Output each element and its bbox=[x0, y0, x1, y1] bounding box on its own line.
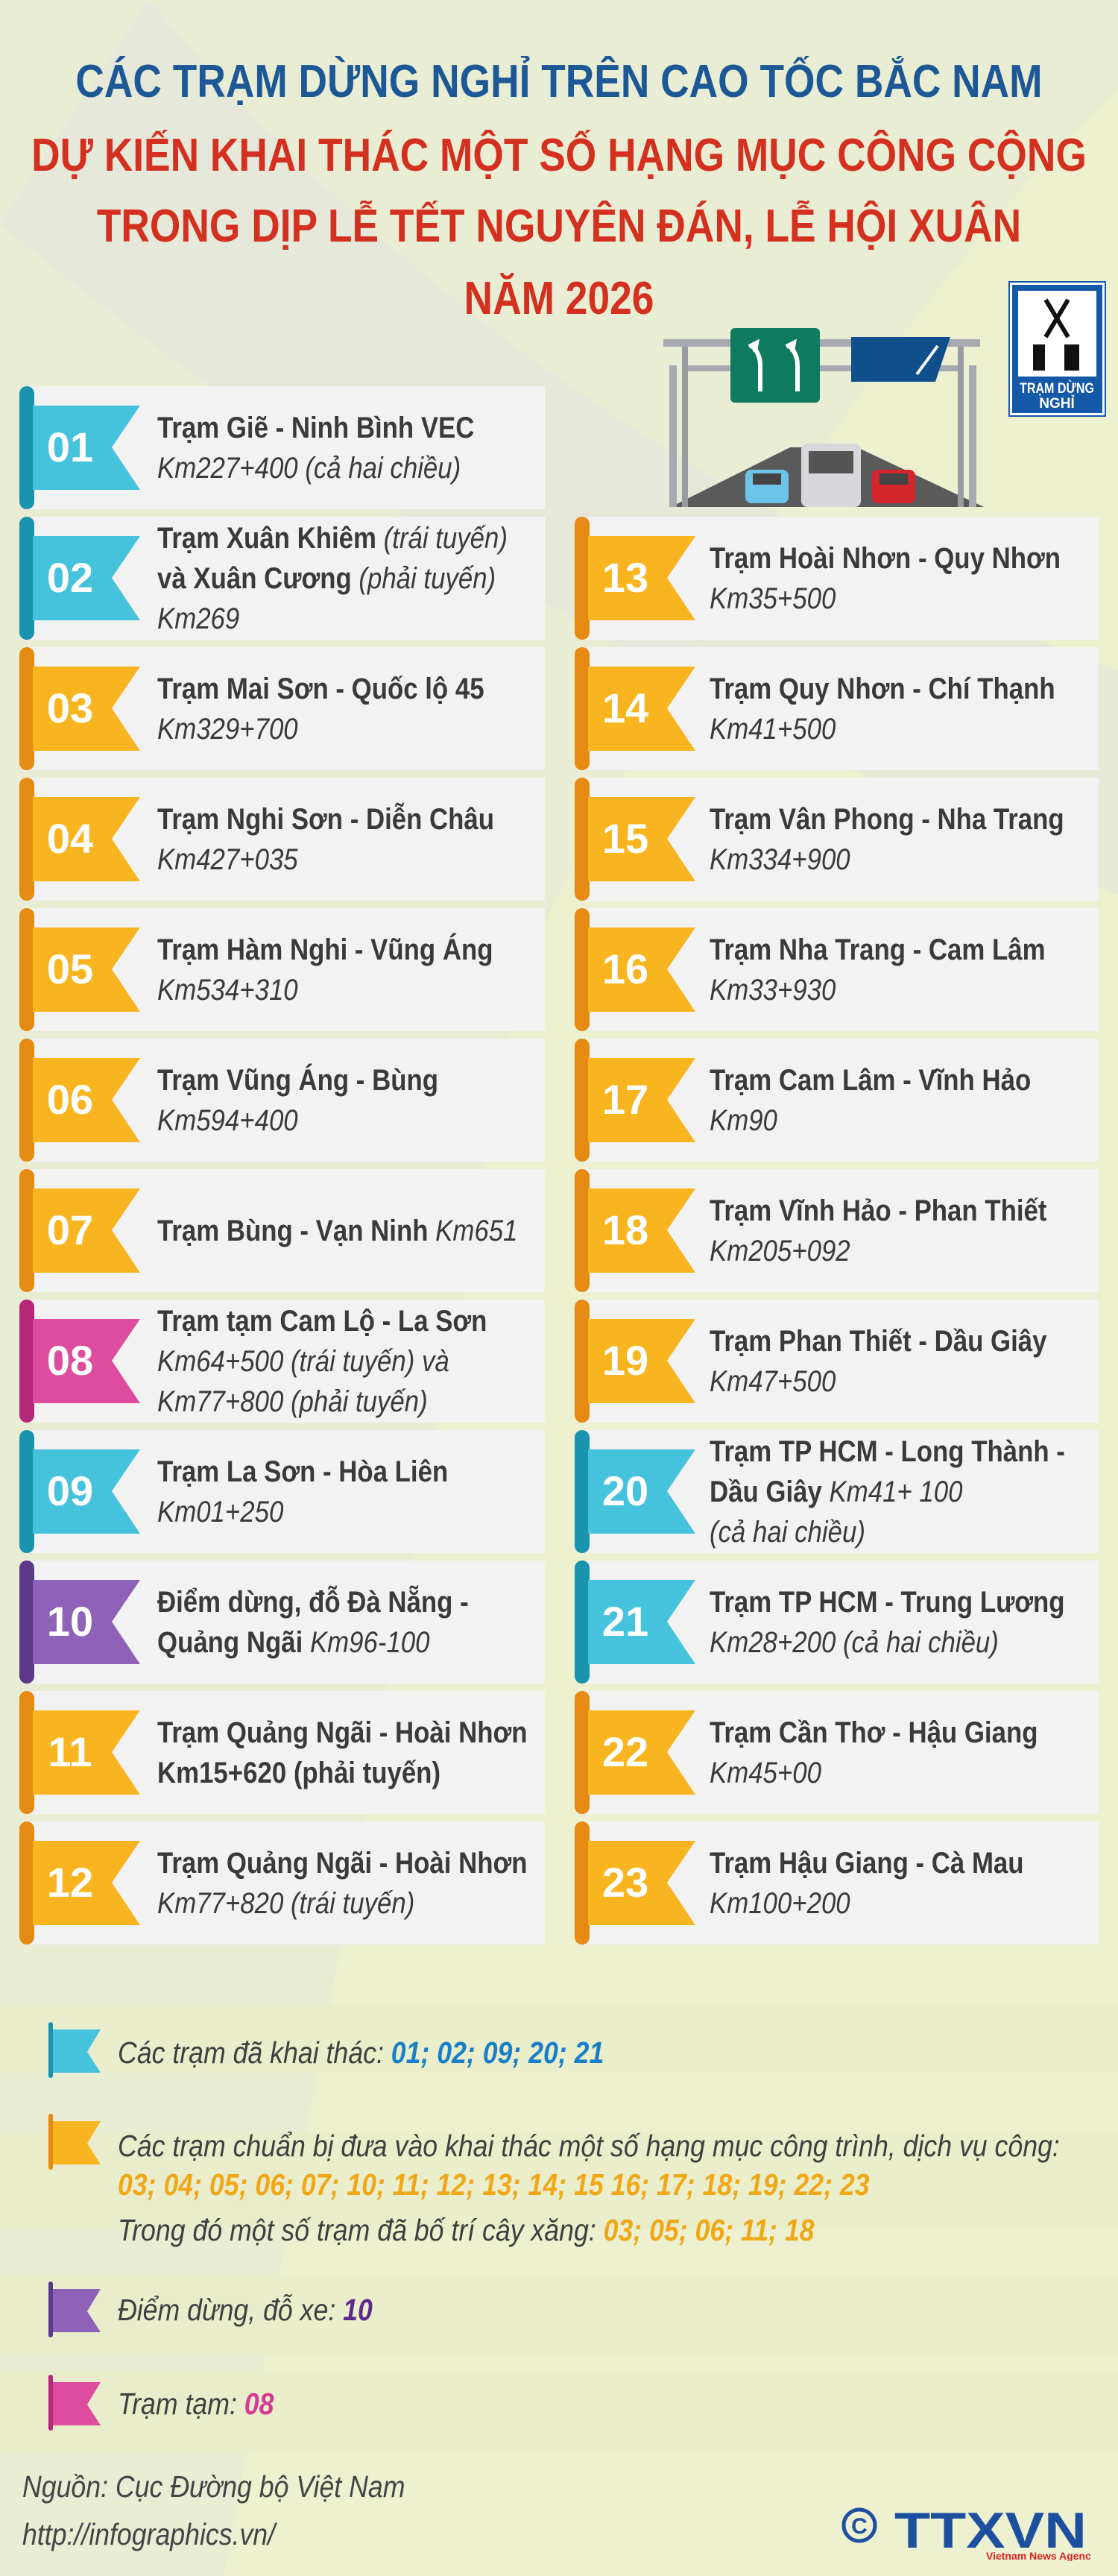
item 08: Trạm tạm Cam Lộ - La Sơn bbox=[157, 1305, 487, 1338]
item 14: Trạm Quy Nhơn - Chí Thạnh bbox=[710, 673, 1055, 705]
legend text: operating: Các trạm đã khai thác: 01; 02; 09; 20; 21 bbox=[118, 2035, 604, 2070]
item 16 bbox=[575, 908, 1099, 1031]
item 02: và Xuân Cương (phải tuyến) bbox=[157, 562, 496, 595]
item 21: Km28+200 (cả hai chiều) bbox=[710, 1625, 999, 1658]
item 23: Km100+200 bbox=[710, 1886, 850, 1919]
item 09: Trạm La Sơn - Hòa Liên bbox=[157, 1455, 448, 1488]
logo: TTXVN: C bbox=[851, 2514, 868, 2539]
item 20: (cả hai chiều) bbox=[710, 1515, 865, 1548]
item 07 bbox=[19, 1169, 545, 1292]
item 09 bbox=[19, 1430, 545, 1553]
item 19 bbox=[575, 1300, 1099, 1423]
item 12 bbox=[19, 1821, 545, 1944]
item 04: Km427+035 bbox=[157, 843, 298, 875]
panel: legend bbox=[48, 2022, 1060, 2431]
item 14 bbox=[575, 647, 1099, 770]
logo: TTXVN bbox=[842, 2502, 1090, 2561]
item 08: Km77+800 (phải tuyến) bbox=[157, 1385, 428, 1418]
item 04: 04 bbox=[47, 815, 93, 862]
legend text: preparing bbox=[118, 2129, 1060, 2202]
item 01: 01 bbox=[47, 423, 93, 470]
item 18: Trạm Vĩnh Hảo - Phan Thiết bbox=[710, 1194, 1046, 1227]
panel: right column list bbox=[575, 517, 1099, 1944]
item 18: 18 bbox=[602, 1206, 648, 1253]
title: DỰ KIẾN KHAI THÁC MỘT SỐ HẠNG MỤC CÔNG CỘNG bbox=[31, 130, 1087, 181]
icon: rest stop sign: NGHỈ bbox=[1039, 395, 1075, 412]
item 18 bbox=[575, 1169, 1099, 1292]
item 03: Trạm Mai Sơn - Quốc lộ 45 bbox=[157, 673, 484, 705]
item 11: 11 bbox=[48, 1728, 92, 1775]
item 22 bbox=[575, 1691, 1099, 1814]
item 13: Trạm Hoài Nhơn - Quy Nhơn bbox=[710, 541, 1061, 574]
item 07: Trạm Bùng - Vạn Ninh Km651 bbox=[157, 1214, 517, 1247]
title: NĂM 2026 bbox=[464, 273, 654, 324]
item 03: Km329+700 bbox=[157, 713, 298, 746]
title: CÁC TRẠM DỪNG NGHỈ TRÊN CAO TỐC BẮC NAM bbox=[75, 56, 1043, 107]
item 12: 12 bbox=[47, 1859, 93, 1906]
item 12: Km77+820 (trái tuyến) bbox=[157, 1886, 414, 1919]
item 01: Trạm Giẽ - Ninh Bình VEC bbox=[157, 412, 474, 444]
item 15: Trạm Vân Phong - Nha Trang bbox=[710, 802, 1064, 835]
item 15: Km334+900 bbox=[710, 843, 850, 875]
item 09: 09 bbox=[47, 1467, 93, 1514]
item 10: 10 bbox=[47, 1598, 93, 1645]
item 16: Trạm Nha Trang - Cam Lâm bbox=[710, 933, 1046, 966]
item 15: 15 bbox=[602, 815, 648, 862]
item 02: 02 bbox=[47, 554, 93, 601]
item 17: 17 bbox=[602, 1076, 648, 1123]
item 06 bbox=[19, 1039, 545, 1162]
item 17 bbox=[575, 1039, 1099, 1162]
item 15 bbox=[575, 778, 1099, 901]
item 10 bbox=[19, 1561, 545, 1684]
item 13: 13 bbox=[602, 554, 648, 601]
item 02: Km269 bbox=[157, 602, 239, 635]
item 23: 23 bbox=[602, 1859, 648, 1906]
item 05 bbox=[19, 908, 545, 1031]
item 04: Trạm Nghi Sơn - Diễn Châu bbox=[157, 802, 494, 835]
item 01: Km227+400 (cả hai chiều) bbox=[157, 452, 461, 485]
legend flag: orange bbox=[48, 2114, 101, 2170]
item 19: Trạm Phan Thiết - Dầu Giây bbox=[710, 1324, 1047, 1357]
item 13: Km35+500 bbox=[710, 582, 836, 614]
legend text: preparing: Các trạm chuẩn bị đưa vào khai thác một số hạng mục công trình, dịch vụ công: bbox=[118, 2129, 1060, 2163]
item 23 bbox=[575, 1821, 1099, 1944]
title: TRONG DỊP LỄ TẾT NGUYÊN ĐÁN, LỄ HỘI XUÂN bbox=[97, 201, 1021, 252]
item 06: Trạm Vũng Áng - Bùng bbox=[157, 1063, 438, 1096]
item 22: Km45+00 bbox=[710, 1757, 821, 1789]
item 16: Km33+930 bbox=[710, 974, 836, 1007]
item 17: Km90 bbox=[710, 1103, 777, 1136]
item 03 bbox=[19, 647, 545, 770]
item 10: Quảng Ngãi Km96-100 bbox=[157, 1625, 430, 1658]
item 11 bbox=[19, 1691, 545, 1814]
source: http://infographics.vn/ bbox=[22, 2517, 275, 2551]
item 21 bbox=[575, 1561, 1099, 1684]
item 20 bbox=[575, 1430, 1099, 1553]
item 22: Trạm Cần Thơ - Hậu Giang bbox=[710, 1716, 1038, 1749]
logo: TTXVN: TTXVN bbox=[894, 2502, 1087, 2559]
icon: rest stop sign bbox=[1010, 283, 1105, 415]
item 22: 22 bbox=[602, 1728, 648, 1775]
legend flag: purple bbox=[48, 2281, 101, 2337]
item 14: Km41+500 bbox=[710, 713, 836, 746]
illustration: highway gantry with cars bbox=[663, 328, 984, 507]
item 06: 06 bbox=[47, 1076, 93, 1123]
item 05: Trạm Hàm Nghi - Vũng Áng bbox=[157, 933, 493, 966]
item 05: 05 bbox=[47, 945, 93, 992]
item 18: Km205+092 bbox=[710, 1235, 850, 1267]
title bbox=[31, 56, 1087, 324]
item 10: Điểm dừng, đỗ Đà Nẵng - bbox=[157, 1585, 469, 1618]
item 13 bbox=[575, 517, 1099, 640]
source bbox=[22, 2469, 405, 2551]
legend text: temporary: Trạm tạm: 08 bbox=[118, 2387, 274, 2421]
item 05: Km534+310 bbox=[157, 974, 298, 1007]
item 23: Trạm Hậu Giang - Cà Mau bbox=[710, 1846, 1024, 1879]
item 11: Km15+620 (phải tuyến) bbox=[157, 1757, 440, 1789]
legend flag: teal bbox=[48, 2022, 101, 2078]
item 21: Trạm TP HCM - Trung Lương bbox=[710, 1585, 1065, 1618]
item 08: 08 bbox=[47, 1337, 93, 1384]
item 19: Km47+500 bbox=[710, 1364, 836, 1397]
item 06: Km594+400 bbox=[157, 1103, 298, 1136]
source: Nguồn: Cục Đường bộ Việt Nam bbox=[22, 2469, 405, 2504]
item 07: 07 bbox=[47, 1206, 93, 1253]
item 20: Dầu Giây Km41+ 100 bbox=[710, 1475, 962, 1508]
legend text: preparing: 03; 04; 05; 06; 07; 10; 11; 12; 13; 14; 15 16; 17; 18; 19; 22; 23 bbox=[118, 2167, 870, 2202]
item 12: Trạm Quảng Ngãi - Hoài Nhơn bbox=[157, 1846, 528, 1879]
legend flag: pink bbox=[48, 2375, 101, 2431]
item 20: Trạm TP HCM - Long Thành - bbox=[710, 1435, 1065, 1467]
legend text: petrol: Trong đó một số trạm đã bố trí cây xăng: 03; 05; 06; 11; 18 bbox=[118, 2213, 815, 2247]
item 04 bbox=[19, 778, 545, 901]
item 02: Trạm Xuân Khiêm (trái tuyến) bbox=[157, 522, 508, 555]
legend text: stop point: Điểm dừng, đỗ xe: 10 bbox=[118, 2293, 373, 2327]
item 16: 16 bbox=[602, 945, 648, 992]
item 01 bbox=[19, 386, 545, 509]
item 17: Trạm Cam Lâm - Vĩnh Hảo bbox=[710, 1063, 1031, 1096]
item 11: Trạm Quảng Ngãi - Hoài Nhơn bbox=[157, 1716, 528, 1749]
item 14: 14 bbox=[602, 684, 648, 731]
item 03: 03 bbox=[47, 684, 93, 731]
item 02 bbox=[19, 517, 545, 640]
item 19: 19 bbox=[602, 1337, 648, 1384]
item 08 bbox=[19, 1300, 545, 1423]
item 20: 20 bbox=[602, 1467, 648, 1514]
item 08: Km64+500 (trái tuyến) và bbox=[157, 1345, 449, 1378]
panel: left column list bbox=[19, 386, 545, 1944]
item 09: Km01+250 bbox=[157, 1496, 283, 1528]
item 21: 21 bbox=[602, 1598, 648, 1645]
